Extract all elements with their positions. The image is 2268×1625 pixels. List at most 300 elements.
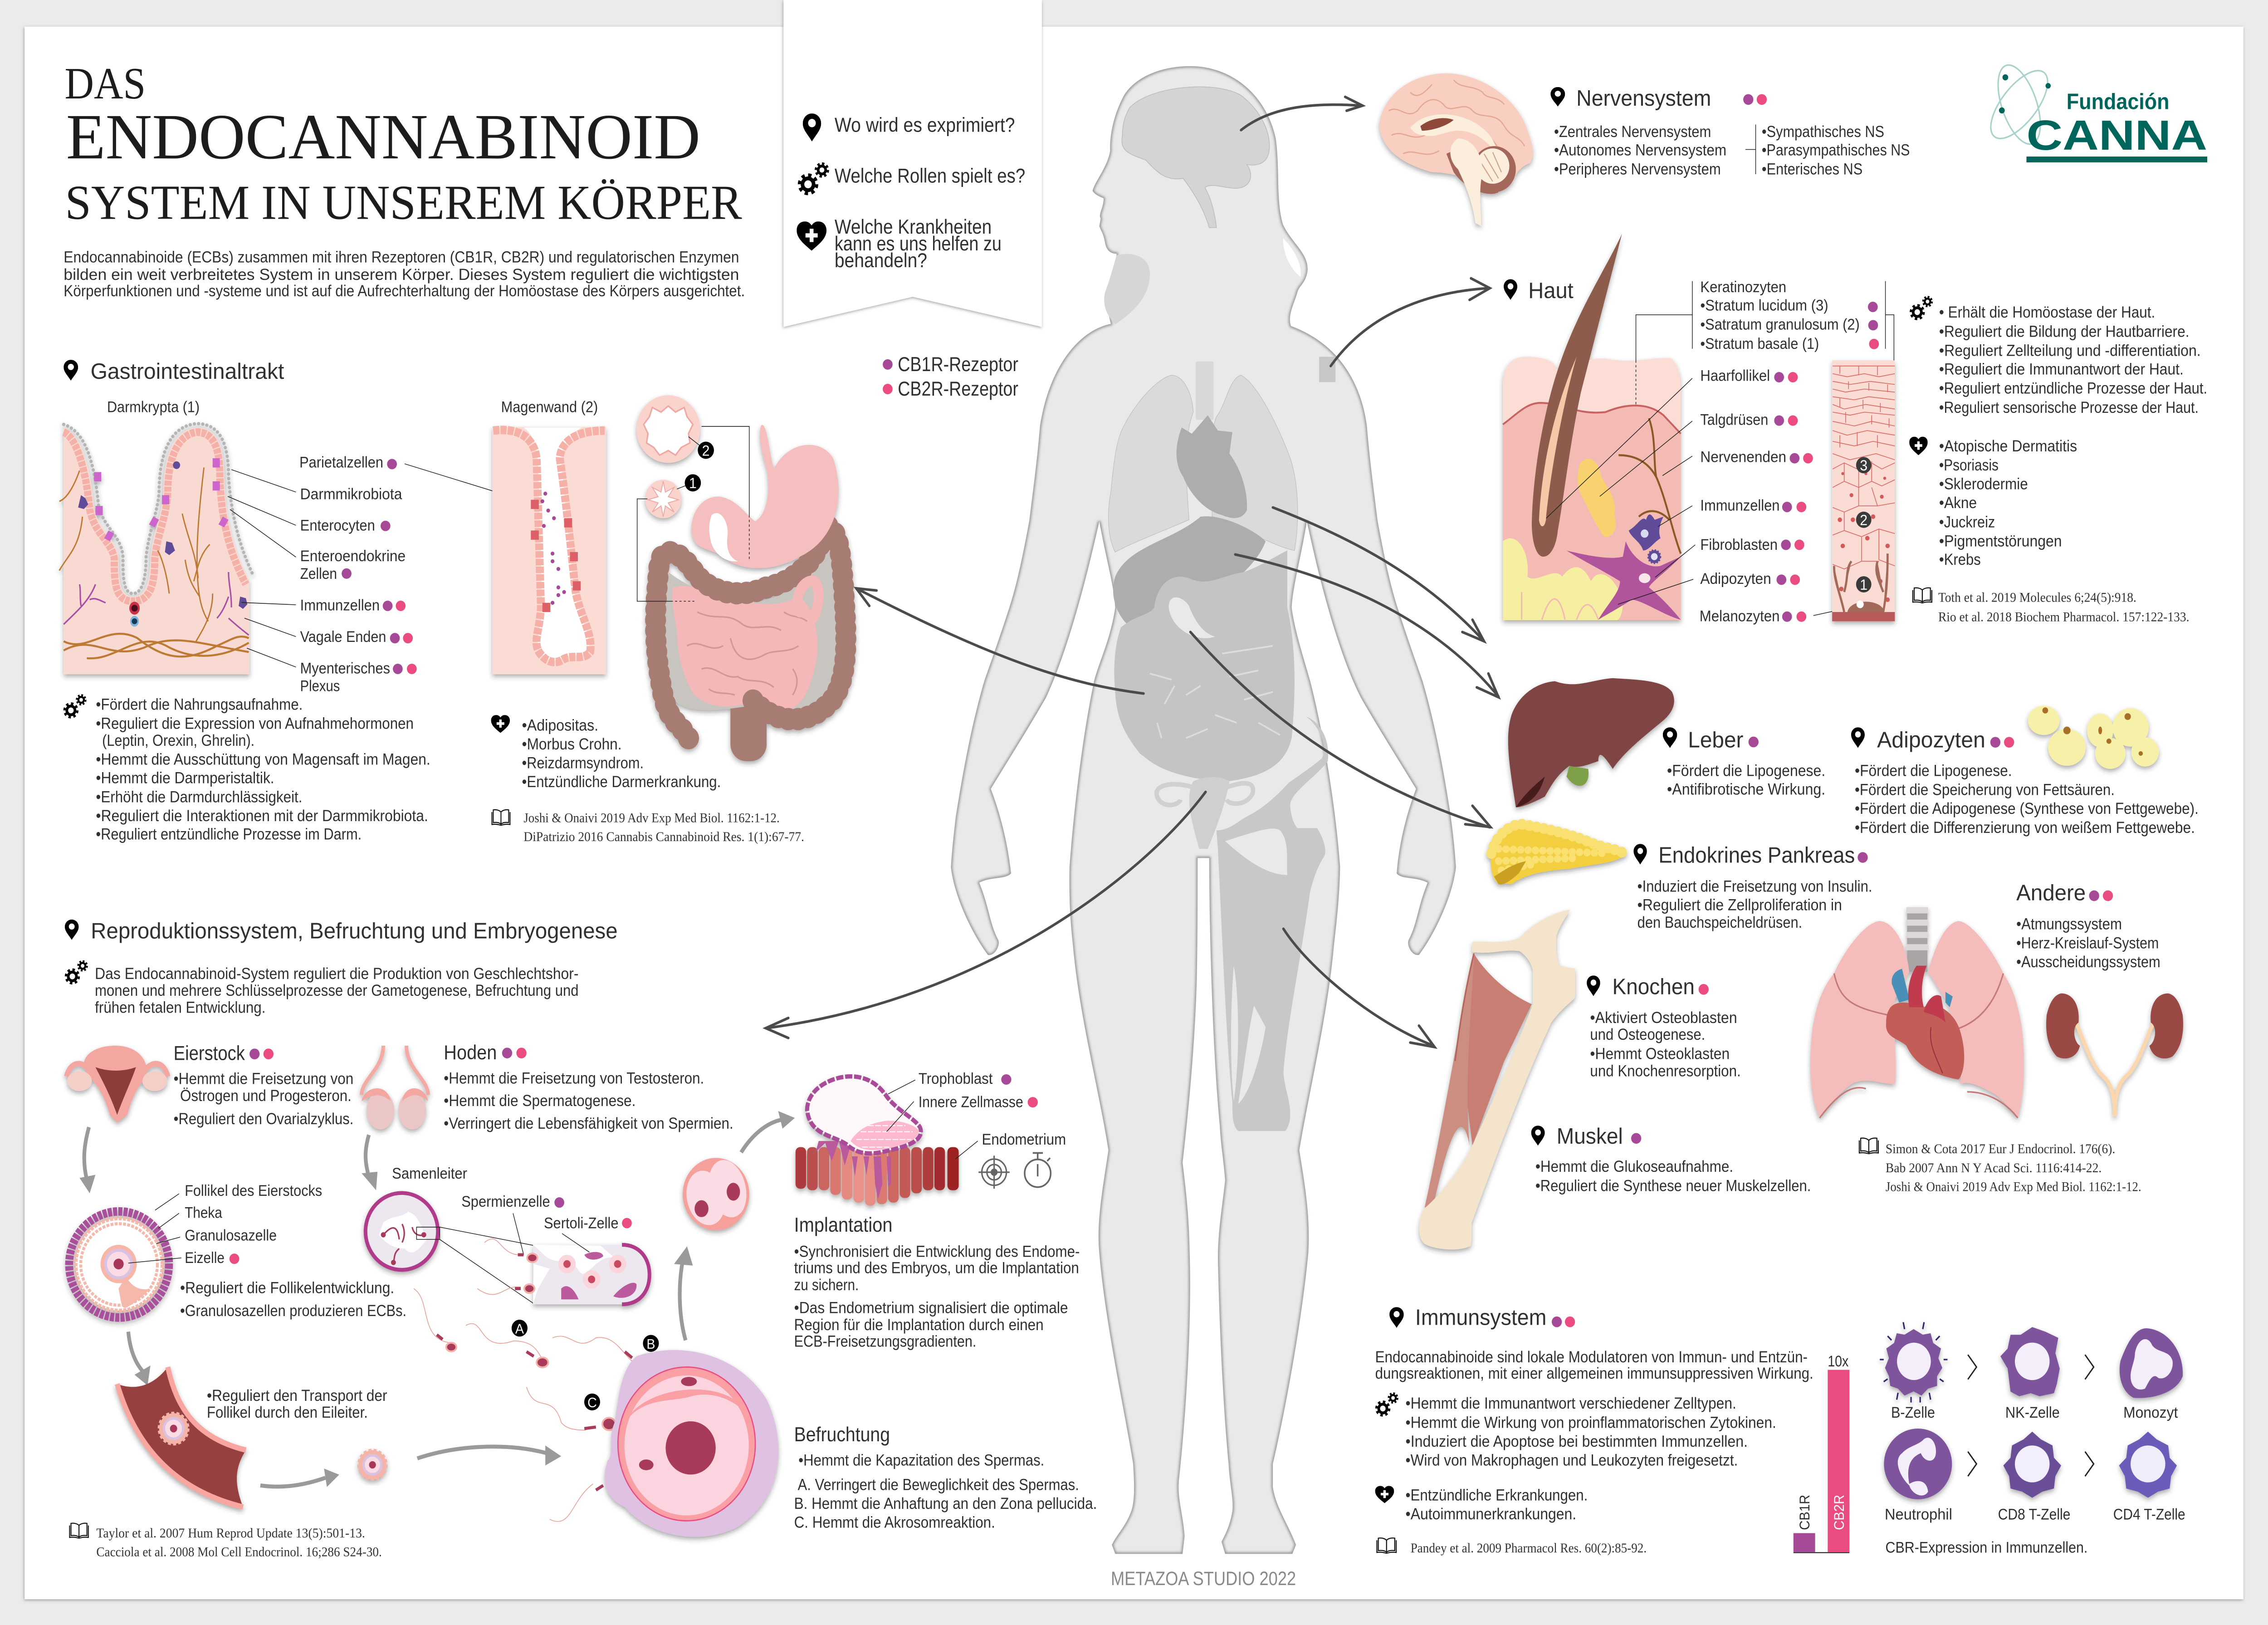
- colon: [655, 526, 846, 738]
- text: skin diseases: •Krebs: [1939, 551, 1981, 568]
- diagram: oviduct: [117, 1367, 246, 1507]
- badge 1: 1: [689, 475, 697, 491]
- diagram: lungs and heart: [1810, 907, 2024, 1118]
- label: B-Zelle: B-Zelle: [1891, 1404, 1935, 1421]
- icon: target: [978, 1155, 1010, 1189]
- text: pancreas: den Bauchspeicheldrüsen.: [1637, 914, 1802, 931]
- organ: hip muscle cutout: [1225, 828, 1287, 875]
- skin: sebaceous gland: [1578, 459, 1616, 537]
- references: other: Bab 2007 Ann N Y Acad Sci. 1116:414-22.: [1886, 1161, 2102, 1175]
- labels: skin structures: Keratinozyten: [1700, 278, 1786, 295]
- text: muscle: [1535, 1158, 1811, 1195]
- text: testes: •Hemmt die Spermatogenese.: [444, 1092, 635, 1110]
- text: skin functions: [1939, 303, 2207, 416]
- heading: Leber: Leber: [1688, 728, 1743, 753]
- diagram: epidermis strip: [1832, 361, 1895, 621]
- text: gut diseases: [522, 717, 721, 791]
- arrow: brain to nervous system: [1241, 97, 1363, 130]
- icon: heart, gut: [491, 715, 510, 733]
- stomach: [691, 425, 838, 568]
- heading: Hoden: [444, 1042, 527, 1064]
- receptor legend: CB2R-Rezeptor: [898, 378, 1018, 400]
- diagram: brain: [1379, 73, 1533, 226]
- text: oviduct: •Reguliert den Transport der: [207, 1387, 387, 1405]
- labels: crypt cell types: Myenterisches: [300, 660, 390, 677]
- small intestine folds: [687, 612, 807, 695]
- bar chart: CB1R vs CB2R: [1794, 1352, 1849, 1553]
- text: follicle: •Reguliert die Follikelentwicklung.: [180, 1279, 394, 1297]
- skin: nerve endings: [1618, 418, 1681, 553]
- text: nervous system: [1554, 123, 1910, 178]
- chevron: [1968, 1452, 1976, 1476]
- organ: femur silhouette: [1217, 717, 1328, 1131]
- labels: crypt cell types: Darmmikrobiota: [300, 485, 402, 503]
- organ: trachea: [1196, 362, 1213, 420]
- arrow: to liver: [1235, 554, 1499, 697]
- labels: skin structures: •Stratum lucidum (3): [1700, 297, 1828, 314]
- text: implantation: zu sichern.: [794, 1276, 859, 1294]
- diagram: pancreas: [1491, 824, 1626, 885]
- labels: crypt cell types: Zellen: [300, 565, 337, 582]
- text: liver: [1667, 762, 1825, 798]
- badge B: B: [646, 1336, 655, 1352]
- arrow: skin square to Haut: [1331, 279, 1490, 366]
- labels: skin structures: Haarfollikel: [1700, 367, 1770, 384]
- heading: Haut: [1504, 279, 1574, 303]
- title: DAS: [65, 59, 146, 108]
- text: liver: •Antifibrotische Wirkung.: [1667, 781, 1825, 798]
- text: nervous system: •Peripheres Nervensystem: [1554, 161, 1721, 178]
- crypt: nerve fibres: [59, 467, 213, 643]
- text: nervous system: •Enterisches NS: [1762, 161, 1862, 178]
- text: skin diseases: •Atopische Dermatitis: [1939, 437, 2077, 455]
- heading: Immunsystem: Immunsystem: [1415, 1305, 1546, 1330]
- badge 3: 3: [1860, 457, 1867, 474]
- labels: skin structures: Fibroblasten: [1700, 536, 1778, 553]
- cell: B-Zelle: [1880, 1322, 1947, 1402]
- text: nervous system: •Zentrales Nervensystem: [1554, 123, 1711, 141]
- sperm cells: [414, 1239, 647, 1522]
- text: reproduction intro: monen und mehrere Schlüsselprozesse der Gametogenese, Befruchtung und: [95, 982, 579, 999]
- text: fertilisation: •Hemmt die Kapazitation des Spermas.: [798, 1451, 1044, 1469]
- badge 1 skin: 1: [1860, 577, 1867, 593]
- text: skin functions: •Reguliert sensorische Prozesse der Haut.: [1939, 399, 2199, 416]
- icon: book, skin: [1913, 588, 1932, 603]
- cell: CD8 T-Zelle: [2003, 1432, 2061, 1498]
- endometrium columns: [796, 1147, 959, 1205]
- ribbon: question 3: kann es uns helfen zu: [835, 233, 1002, 255]
- chevron: [2085, 1452, 2094, 1476]
- text: implantation: ECB-Freisetzungsgradienten.: [794, 1333, 976, 1351]
- organ: lung left: [1109, 375, 1193, 552]
- labels: follicle: Theka: [185, 1204, 222, 1221]
- icon: heart, immune: [1375, 1486, 1394, 1503]
- strip: melanocyte: [1834, 553, 1887, 612]
- references: reproduction: Taylor et al. 2007 Hum Reprod Update 13(5):501-13.: [96, 1526, 365, 1541]
- text: immune intro: dungsreaktionen, mit einer allgemeinen immunsuppressiven Wirkung.: [1375, 1365, 1813, 1382]
- heading: Hoden: Hoden: [444, 1042, 497, 1064]
- organ: fallopian tubes: [1157, 783, 1253, 805]
- references: gut: DiPatrizio 2016 Cannabis Cannabinoid Res. 1(1):67-77.: [523, 830, 804, 844]
- chevron: [2085, 1355, 2094, 1380]
- logo: Fundación CANNA: CANNA: [2026, 112, 2207, 159]
- diagram: tubule detail: [533, 1245, 650, 1304]
- ribbon: question 1: Wo wird es exprimiert?: [835, 114, 1015, 137]
- organ: uterus silhouette: [1189, 777, 1229, 849]
- heading: Eierstock: Eierstock: [174, 1042, 245, 1065]
- diagram: two-cell embryo: [681, 1155, 752, 1230]
- labels: skin structures: •Stratum basale (1): [1700, 335, 1819, 352]
- text: bone: •Aktiviert Osteoblasten: [1590, 1009, 1737, 1027]
- bar chart: CB1R vs CB2R: CB2R: [1831, 1495, 1847, 1530]
- arrow: to muscle: [1283, 929, 1435, 1047]
- text: gut functions: •Fördert die Nahrungsaufnahme.: [96, 696, 303, 714]
- crypt: myenteric plexus: [64, 634, 249, 658]
- labels: sperm and sertoli: Spermienzelle: [461, 1193, 550, 1210]
- zoom box and lines: [416, 1227, 534, 1304]
- crypt: vagal endings: [64, 572, 249, 635]
- text: fertilisation: A. Verringert die Beweglichkeit des Spermas.: [798, 1476, 1079, 1494]
- labels: crypt cell types: Enteroendokrine: [300, 547, 406, 564]
- text: gut diseases: •Adipositas.: [522, 717, 598, 734]
- text: pancreas: [1637, 877, 1872, 931]
- labels: crypt cell types: Immunzellen: [300, 597, 380, 614]
- text: gut functions: •Reguliert die Interaktionen mit der Darmmikrobiota.: [96, 807, 428, 825]
- panel: reproduction heading: Reproduktionssystem, Befruchtung und Embryogenese: [91, 919, 618, 944]
- text: skin functions: • Erhält die Homöostase der Haut.: [1939, 303, 2155, 321]
- heading: Nervensystem: Nervensystem: [1576, 86, 1711, 111]
- text: testes: •Hemmt die Freisetzung von Testosteron.: [444, 1069, 704, 1087]
- text: implantation: Region für die Implantation durch einen: [794, 1316, 1044, 1334]
- rectum: [730, 692, 767, 761]
- references: other: [1886, 1142, 2141, 1194]
- arrow: embryo to implantation: [741, 1111, 795, 1152]
- intro paragraph: Körperfunktionen und -systeme und ist auf die Aufrechterhaltung der Homöostase des Körpers ausgerichtet.: [64, 282, 745, 300]
- text: other systems: •Herz-Kreislauf-System: [2016, 935, 2159, 952]
- organ: lung right: [1211, 375, 1298, 550]
- heading: Adipozyten: Adipozyten: [1877, 728, 1985, 753]
- labels: sperm and sertoli: [461, 1193, 632, 1254]
- diagram: fertilised egg: [605, 1350, 778, 1537]
- diagram: liver: [1508, 678, 1674, 808]
- arrow: to reproduction: [766, 792, 1206, 1038]
- text: adipocytes: [1855, 762, 2199, 837]
- heading: Befruchtung: Befruchtung: [794, 1424, 890, 1446]
- labels: sperm and sertoli: Sertoli-Zelle: [544, 1214, 619, 1232]
- diagram: stomach wall: [492, 427, 606, 674]
- text: gut functions: [96, 696, 430, 843]
- label: CD8 T-Zelle: CD8 T-Zelle: [1998, 1506, 2070, 1523]
- body silhouette with organs: [951, 66, 1456, 1554]
- text: follicle: [180, 1279, 406, 1320]
- blastocyst: [807, 1077, 921, 1154]
- references: skin: [1938, 591, 2190, 625]
- arrow: to Andere: [1273, 508, 1484, 641]
- arrow: to pancreas: [1190, 632, 1491, 827]
- studio credit: METAZOA STUDIO 2022: [1111, 1568, 1296, 1589]
- icon: gears, immune: [1377, 1393, 1398, 1415]
- ribbon: question 3: [797, 216, 1002, 272]
- labels: skin structures: Talgdrüsen: [1700, 411, 1768, 428]
- label: Trophoblast: Trophoblast: [919, 1070, 992, 1087]
- references: immune: Pandey et al. 2009 Pharmacol Res. 60(2):85-92.: [1411, 1541, 1647, 1556]
- label: Samenleiter: Samenleiter: [392, 1165, 467, 1182]
- diagram: skin section: [1503, 234, 1681, 620]
- heading: Endokrines Pankreas: Endokrines Pankreas: [1658, 843, 1855, 868]
- ribbon: question 3: behandeln?: [835, 250, 927, 272]
- text: gut diseases: •Entzündliche Darmerkrankung.: [522, 773, 721, 791]
- text: gut diseases: •Reizdarmsyndrom.: [522, 754, 644, 772]
- text: ovary: [174, 1070, 353, 1128]
- arrow: to gut: [856, 588, 1144, 694]
- labels: skin structures: Melanozyten: [1700, 607, 1779, 625]
- intro paragraph: Endocannabinoide (ECBs) zusammen mit ihren Rezeptoren (CB1R, CB2R) und regulatorischen Enzymen: [64, 249, 739, 266]
- badge A: A: [515, 1322, 524, 1337]
- text: testes: [444, 1069, 733, 1132]
- text: immune diseases: •Entzündliche Erkrankungen.: [1406, 1486, 1588, 1504]
- text: fertilisation: C. Hemmt die Akrosomreaktion.: [794, 1513, 995, 1532]
- heading: Knochen: [1587, 974, 1709, 999]
- organ: brain silhouette: [1122, 87, 1270, 228]
- label: Magenwand: Magenwand (2): [501, 398, 598, 416]
- references: gut: Joshi & Onaivi 2019 Adv Exp Med Biol. 1162:1-12.: [523, 811, 780, 826]
- badge C: [584, 1394, 600, 1410]
- organ: hair lock: [1104, 254, 1150, 324]
- references: other: Simon & Cota 2017 Eur J Endocrinol. 176(6).: [1886, 1142, 2115, 1156]
- text: skin functions: •Reguliert entzündliche Prozesse der Haut.: [1939, 380, 2207, 397]
- crypt: epithelial markers: [94, 458, 229, 541]
- body inner shadow: [951, 66, 1456, 1554]
- trachea: [1907, 907, 1927, 972]
- cell: Neutrophil: [1884, 1429, 1952, 1499]
- text: ovary: •Hemmt die Freisetzung von: [174, 1070, 353, 1088]
- text: bone: •Hemmt Osteoklasten: [1590, 1045, 1730, 1063]
- dashed bracket ends: [671, 515, 749, 601]
- references: other: Joshi & Onaivi 2019 Adv Exp Med Biol. 1162:1-12.: [1886, 1180, 2141, 1194]
- text: oviduct: Follikel durch den Eileiter.: [207, 1404, 368, 1421]
- organ: hair gap: [1283, 238, 1301, 277]
- text: skin diseases: •Sklerodermie: [1939, 475, 2028, 493]
- ribbon: question 2: Welche Rollen spielt es?: [835, 165, 1025, 187]
- icon: gears, skin: [1911, 297, 1932, 319]
- text: gut functions: •Hemmt die Darmperistaltik.: [96, 769, 274, 787]
- text: oviduct: [207, 1387, 387, 1421]
- diagram: released follicle: [359, 1450, 386, 1479]
- labels: follicle: Eizelle: [185, 1249, 225, 1266]
- icon: book, immune: [1377, 1538, 1396, 1553]
- organ: stomach highlight: [1169, 597, 1215, 638]
- diagram: seminiferous tubule: [366, 1193, 438, 1270]
- diagram: cross-section 2: [636, 395, 700, 463]
- labels: crypt cell types: Enterocyten: [300, 517, 375, 534]
- text: implantation: [794, 1243, 1080, 1351]
- text: ovary: •Reguliert den Ovarialzyklus.: [174, 1110, 353, 1128]
- arrow: follicle to oviduct: [128, 1331, 151, 1385]
- text: nervous system: •Sympathisches NS: [1762, 123, 1884, 141]
- labels: skin structures: •Satratum granulosum (2): [1700, 315, 1860, 333]
- stomach wall: red cells: [531, 500, 581, 612]
- text: nervous system: •Parasympathisches NS: [1762, 141, 1910, 159]
- text: bone: und Knochenresorption.: [1590, 1062, 1741, 1080]
- diagram: leg muscle and bone: [1419, 910, 1575, 1249]
- text: immune functions: [1406, 1395, 1776, 1469]
- labels: follicle: Granulosazelle: [185, 1227, 277, 1244]
- intro paragraph: bilden ein weit verbreitetes System in unserem Körper. Dieses System reguliert die wichtigsten: [64, 266, 739, 284]
- references: skin: Toth et al. 2019 Molecules 6;24(5):918.: [1938, 591, 2136, 605]
- text: skin diseases: •Pigmentstörungen: [1939, 532, 2062, 550]
- diagram: fat cells: [2028, 706, 2159, 769]
- labels: crypt cell types: [299, 454, 417, 695]
- logo: Fundación CANNA: [1981, 59, 2207, 162]
- caption: CBR expression: CBR-Expression in Immunzellen.: [1886, 1539, 2087, 1556]
- text: gut functions: •Hemmt die Ausschüttung von Magensaft im Magen.: [96, 751, 430, 768]
- text: pancreas: •Reguliert die Zellproliferation in: [1637, 896, 1842, 914]
- label: Innere Zellmasse: Innere Zellmasse: [919, 1093, 1023, 1111]
- text: gut functions: •Erhöht die Darmdurchlässigkeit.: [96, 788, 302, 806]
- title: ENDOCANNABINOID: [66, 101, 700, 172]
- chevron: [1968, 1355, 1976, 1380]
- labels: crypt cell types: Vagale Enden: [300, 628, 386, 645]
- icon: gears, gut: [64, 695, 86, 717]
- label: Darmkrypta: Darmkrypta (1): [107, 398, 200, 416]
- diagram: intestinal crypt: [59, 424, 253, 674]
- text: skin functions: •Reguliert die Immunantwort der Haut.: [1939, 360, 2184, 378]
- label: Monozyt: Monozyt: [2123, 1404, 2178, 1421]
- organ: thigh muscle cutout: [1231, 966, 1266, 1104]
- title: SYSTEM IN UNSEREM KÖRPER: [65, 175, 743, 230]
- labels: follicle: Follikel des Eierstocks: [185, 1182, 322, 1199]
- ribbon: [783, 0, 1042, 327]
- text: ovary: Östrogen und Progesteron.: [180, 1087, 352, 1105]
- diagram: cross-section 1: [645, 480, 681, 518]
- icon: book, gut: [492, 810, 510, 825]
- text: skin diseases: [1939, 437, 2077, 568]
- references: gut: [523, 811, 804, 844]
- references: reproduction: [96, 1526, 382, 1560]
- heading: Implantation: Implantation: [794, 1214, 892, 1236]
- skin: fat cells: [1503, 538, 1623, 620]
- organ: liver silhouette: [1113, 516, 1266, 631]
- label: CD4 T-Zelle: CD4 T-Zelle: [2113, 1506, 2185, 1523]
- small intestine: [672, 586, 817, 710]
- text: muscle: •Hemmt die Glukoseaufnahme.: [1535, 1158, 1733, 1175]
- badge B: [643, 1335, 659, 1352]
- heading: Muskel: [1531, 1124, 1641, 1149]
- logo: Fundación CANNA: Fundación: [2067, 89, 2170, 114]
- text: adipocytes: •Fördert die Speicherung von Fettsäuren.: [1855, 781, 2115, 799]
- text: muscle: •Reguliert die Synthese neuer Muskelzellen.: [1535, 1177, 1811, 1195]
- text: gut functions: •Reguliert entzündliche Prozesse im Darm.: [96, 826, 362, 843]
- text: reproduction intro: [95, 965, 579, 1017]
- text: immune diseases: [1406, 1486, 1588, 1523]
- label: NK-Zelle: NK-Zelle: [2005, 1404, 2060, 1421]
- text: adipocytes: •Fördert die Differenzierung von weißem Fettgewebe.: [1855, 819, 2195, 837]
- badge 2: [689, 437, 714, 459]
- text: immune diseases: •Autoimmunerkrankungen.: [1406, 1505, 1576, 1523]
- intro paragraph: [64, 249, 745, 300]
- text: immune functions: •Induziert die Apoptose bei bestimmten Immunzellen.: [1406, 1433, 1748, 1450]
- skin: fibroblast: [1566, 541, 1681, 620]
- text: implantation: triums und des Embryos, um die Implantation: [794, 1259, 1079, 1277]
- heading: Adipozyten: [1851, 727, 2014, 753]
- text: skin functions: •Reguliert die Bildung der Hautbarriere.: [1939, 323, 2190, 341]
- text: bone: [1590, 1009, 1741, 1080]
- references: skin: Rio et al. 2018 Biochem Pharmacol. 157:122-133.: [1938, 610, 2190, 625]
- organ: intestine folds: [1150, 646, 1280, 738]
- inner cell mass: [850, 1121, 919, 1150]
- text: adipocytes: •Fördert die Lipogenese.: [1855, 762, 2012, 780]
- text: testes: •Verringert die Lebensfähigkeit von Spermien.: [444, 1115, 733, 1132]
- text: skin diseases: •Psoriasis: [1939, 456, 1999, 474]
- heading: Andere: Andere: [2016, 881, 2086, 905]
- heart: [1886, 1003, 1964, 1080]
- skin: hair: [1532, 234, 1622, 557]
- text: reproduction intro: frühen fetalen Entwicklung.: [95, 999, 265, 1017]
- badge 2 skin: [1856, 512, 1872, 529]
- text: other systems: •Atmungssystem: [2016, 915, 2122, 933]
- badge C: C: [587, 1395, 597, 1410]
- label: Neutrophil: Neutrophil: [1885, 1506, 1952, 1523]
- text: gut diseases: •Morbus Crohn.: [522, 735, 622, 753]
- text: skin diseases: •Juckreiz: [1939, 513, 1995, 531]
- text: skin functions: •Reguliert Zellteilung und -differentiation.: [1939, 342, 2201, 360]
- title: [65, 59, 743, 230]
- ribbon: question 2: [799, 164, 1025, 193]
- arrow: testes to duct: [362, 1135, 377, 1190]
- crypt: cells: [129, 602, 140, 627]
- bar chart: CB1R vs CB2R: CB1R: [1796, 1495, 1813, 1530]
- skin: dashed bracket: [1636, 361, 1637, 406]
- labels: skin structures: Immunzellen: [1700, 496, 1779, 514]
- text: immune functions: •Hemmt die Immunantwort verschiedener Zelltypen.: [1406, 1395, 1736, 1412]
- badge 3: [1856, 457, 1872, 474]
- text: liver: •Fördert die Lipogenese.: [1667, 762, 1825, 780]
- references: reproduction: Cacciola et al. 2008 Mol Cell Endocrinol. 16;286 S24-30.: [96, 1545, 382, 1560]
- ribbon: question 1: [803, 113, 1015, 142]
- leader lines: crypt: [228, 464, 534, 667]
- diagram: testes: [362, 1046, 428, 1130]
- arrow: egg to embryo: [674, 1246, 693, 1340]
- text: fertilisation: B. Hemmt die Anhaftung an den Zona pellucida.: [794, 1495, 1097, 1512]
- text: fertilisation: [794, 1451, 1097, 1532]
- stomach wall: secretions: [541, 492, 566, 605]
- heading: Nervensystem: [1550, 86, 1767, 111]
- icon: book, reproduction: [69, 1523, 88, 1538]
- text: reproduction intro: Das Endocannabinoid-System reguliert die Produktion von Geschlechtshor-: [95, 965, 579, 983]
- badge 1 skin: [1856, 576, 1872, 593]
- text: implantation: •Synchronisiert die Entwicklung des Endome-: [794, 1243, 1080, 1261]
- heading: Leber: [1663, 727, 1759, 753]
- labels: crypt cell types: Plexus: [300, 677, 340, 695]
- diagram: kidneys and ureters: [2046, 994, 2183, 1116]
- labels: follicle: [128, 1182, 322, 1266]
- arrow: follicle to egg: [417, 1445, 561, 1465]
- icon: timer: [1025, 1153, 1051, 1187]
- text: immune functions: •Hemmt die Wirkung von proinflammatorischen Zytokinen.: [1406, 1414, 1776, 1432]
- cell: NK-Zelle: [2000, 1327, 2060, 1396]
- text: gut functions: •Reguliert die Expression von Aufnahmehormonen: [96, 715, 414, 733]
- text: gut functions: (Leptin, Orexin, Ghrelin).: [102, 732, 254, 749]
- text: pancreas: •Induziert die Freisetzung von Insulin.: [1637, 877, 1872, 896]
- text: implantation: •Das Endometrium signalisiert die optimale: [794, 1299, 1068, 1317]
- badge 2 skin: 2: [1860, 512, 1867, 529]
- label: Endometrium: Endometrium: [982, 1131, 1066, 1148]
- labels: skin structures: Adipozyten: [1700, 570, 1771, 587]
- icon: gears, reproduction: [66, 961, 87, 983]
- labels: skin structures: [1700, 278, 1879, 625]
- icon: book, other: [1859, 1138, 1878, 1154]
- badge 1: [677, 474, 701, 491]
